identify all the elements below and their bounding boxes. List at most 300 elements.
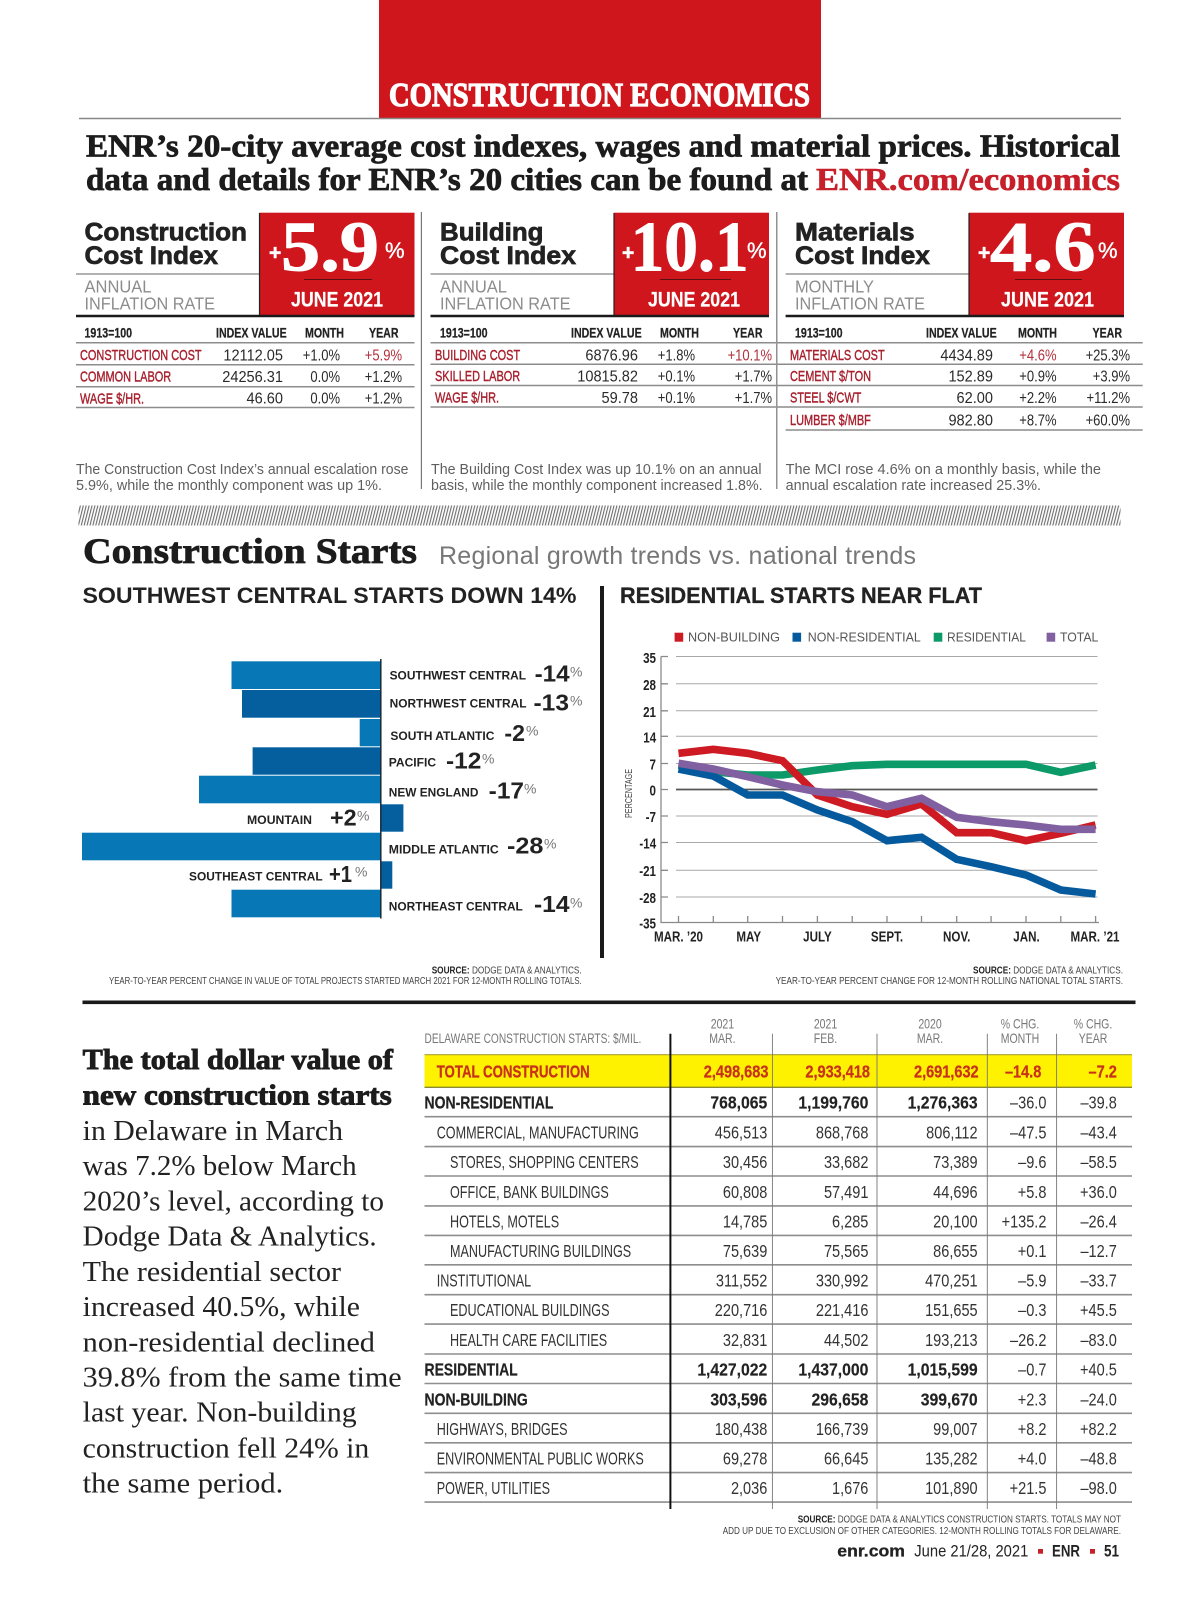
text block: Delaware summary: The total dollar value of xyxy=(83,1044,393,1076)
panel heading: Materials Cost Index: Cost Index xyxy=(795,242,930,270)
text block: Building Cost note xyxy=(431,462,763,494)
row: manufacturing buildings: 75,565 xyxy=(824,1242,868,1261)
label: New England -17%: NEW ENGLAND xyxy=(389,786,479,800)
page footer: ENR xyxy=(1052,1543,1080,1561)
callout: +10.1% June 2021 xyxy=(614,209,769,316)
row: educational buildings: 221,416 xyxy=(816,1301,868,1320)
highlighted row: total construction: 2,691,632 xyxy=(914,1062,979,1082)
table: Materials Cost Index values: 982.80 xyxy=(948,412,993,429)
row: residential: 1,427,022 xyxy=(697,1360,767,1380)
row: highways, bridges: 166,739 xyxy=(816,1420,868,1439)
panel: Building Cost Index xyxy=(430,209,776,494)
y axis labels: 0 xyxy=(650,782,656,799)
row: non-residential xyxy=(424,1093,1117,1113)
label: Mountain +2%: % xyxy=(357,808,369,824)
table: Construction Cost Index values: +5.9% xyxy=(365,348,402,365)
y axis labels xyxy=(623,650,657,932)
row: residential: RESIDENTIAL xyxy=(424,1361,518,1380)
highlighted row: total construction: 2,933,418 xyxy=(805,1062,870,1082)
table header: 2021 xyxy=(711,1016,734,1032)
callout: +10.1% June 2021: + xyxy=(622,242,634,264)
label: Northeast Central -14%: -14 xyxy=(534,891,570,917)
label: Mountain +2% xyxy=(247,804,369,830)
table: Materials Cost Index values: +8.7% xyxy=(1019,412,1057,430)
bar chart: regional starts xyxy=(82,659,582,918)
text block: Building Cost note: basis, while the monthly component increased 1.8%. xyxy=(431,478,763,494)
highlighted row: total construction: –7.2 xyxy=(1089,1062,1117,1082)
table header: MONTH xyxy=(1001,1031,1039,1047)
x axis labels: JAN. xyxy=(1013,928,1040,945)
headline: ENR.com/economics xyxy=(816,161,1120,197)
source note: Delaware table xyxy=(723,1515,1121,1537)
source note: Delaware table: ADD UP DUE TO EXCLUSION OF OTHER CATEGORIES. 12-MONTH ROLLING TOTALS FOR DELAWARE. xyxy=(723,1526,1121,1537)
callout: +4.6% June 2021: + xyxy=(978,242,990,264)
label: Pacific -12%: -12 xyxy=(446,748,481,774)
y axis labels: -21 xyxy=(639,863,656,879)
table: Construction Cost Index values: +1.0% xyxy=(303,348,340,365)
row: stores, shopping centers: STORES, SHOPPING CENTERS xyxy=(450,1153,639,1173)
label: New England -17%: -17 xyxy=(489,778,524,804)
row: highways, bridges: 99,007 xyxy=(933,1420,978,1439)
table: Materials Cost Index values: INDEX VALUE xyxy=(926,325,997,341)
callout: +5.9% June 2021 xyxy=(260,209,414,316)
row: hotels, motels: 20,100 xyxy=(933,1212,978,1232)
x axis labels: MAY xyxy=(736,928,761,945)
row: office, bank buildings: 60,808 xyxy=(723,1183,767,1202)
table: Materials Cost Index values: +25.3% xyxy=(1086,348,1130,365)
table: Materials Cost Index values: +0.9% xyxy=(1019,369,1057,386)
table header: DELAWARE CONSTRUCTION STARTS: $/MIL. xyxy=(424,1031,641,1046)
row: hotels, motels: 6,285 xyxy=(832,1212,868,1232)
row: non-building: NON-BUILDING xyxy=(424,1391,528,1410)
row: environmental public works: –48.8 xyxy=(1080,1449,1117,1469)
row: office, bank buildings xyxy=(450,1183,1117,1202)
table header: FEB. xyxy=(814,1031,837,1047)
row: educational buildings: +45.5 xyxy=(1080,1301,1117,1320)
row: residential: +40.5 xyxy=(1080,1360,1117,1380)
row: environmental public works: 135,282 xyxy=(925,1449,978,1469)
row: highways, bridges: HIGHWAYS, BRIDGES xyxy=(437,1420,568,1439)
row: hotels, motels: 14,785 xyxy=(723,1212,767,1232)
chart heading: Southwest Central starts down 14%: SOUTHWEST CENTRAL STARTS DOWN 14% xyxy=(82,583,576,608)
x axis labels: MAR. ’20 xyxy=(654,928,703,945)
text block: Delaware summary: the same period. xyxy=(83,1467,283,1499)
y axis labels: -14 xyxy=(639,835,657,852)
text block: Delaware summary: 39.8% from the same time xyxy=(83,1362,402,1394)
table: Materials Cost Index values: 62.00 xyxy=(957,390,993,407)
row: institutional: INSTITUTIONAL xyxy=(437,1272,531,1291)
text block: Delaware summary: last year. Non-building xyxy=(83,1397,357,1429)
row: environmental public works: 66,645 xyxy=(824,1449,868,1469)
row: highways, bridges: +8.2 xyxy=(1018,1420,1046,1439)
label: Middle Atlantic -28%: % xyxy=(544,836,556,852)
label: Pacific -12% xyxy=(389,748,494,774)
highlighted row: total construction: TOTAL CONSTRUCTION xyxy=(437,1062,590,1082)
panel heading: Building Cost Index xyxy=(430,219,614,314)
source note: bar chart xyxy=(109,965,582,987)
table: Building Cost Index values: 6876.96 xyxy=(585,347,638,365)
row: stores, shopping centers xyxy=(450,1153,1117,1173)
row: health care facilities: 44,502 xyxy=(824,1331,868,1350)
row: stores, shopping centers: 33,682 xyxy=(824,1153,868,1172)
table: Building Cost Index values: +10.1% xyxy=(728,348,772,365)
row: office, bank buildings: 57,491 xyxy=(824,1183,868,1202)
table: Construction Cost Index values: 12112.05 xyxy=(223,347,283,365)
row: hotels, motels: –26.4 xyxy=(1080,1212,1117,1232)
source note: line chart: YEAR-TO-YEAR PERCENT CHANGE FOR 12-MONTH ROLLING NATIONAL TOTAL STARTS. xyxy=(776,976,1123,987)
row: highways, bridges: 180,438 xyxy=(715,1420,767,1439)
text block: Materials Cost note xyxy=(786,462,1101,494)
callout: +5.9% June 2021: 5.9 xyxy=(281,209,379,287)
callout: +5.9% June 2021: % xyxy=(385,238,405,263)
text block: Construction Cost note: 5.9%, while the monthly component was up 1%. xyxy=(76,478,382,494)
table: Building Cost Index values: BUILDING COST xyxy=(435,346,520,363)
table header: YEAR xyxy=(1079,1031,1108,1047)
table: Materials Cost Index values: YEAR xyxy=(1093,325,1122,341)
row: office, bank buildings: 44,696 xyxy=(933,1183,978,1202)
label: Northeast Central -14% xyxy=(389,891,582,917)
callout: +10.1% June 2021: % xyxy=(747,238,767,263)
source note: line chart: SOURCE: DODGE DATA & ANALYTICS. xyxy=(973,965,1123,976)
text block: Delaware summary: was 7.2% below March xyxy=(83,1150,357,1182)
page footer: 51 xyxy=(1104,1543,1119,1561)
table: Building Cost Index values: +1.7% xyxy=(735,369,772,386)
table: Construction Cost Index values: COMMON LABOR xyxy=(80,368,171,385)
grid and axes xyxy=(661,656,1099,922)
table header: 2021 xyxy=(814,1016,837,1032)
row: stores, shopping centers: 30,456 xyxy=(723,1153,767,1172)
table: Materials Cost Index values: LUMBER $/MBF xyxy=(790,411,871,428)
table: Construction Cost Index values: WAGE $/HR. xyxy=(80,390,144,407)
row: residential: 1,437,000 xyxy=(798,1360,868,1380)
row: manufacturing buildings xyxy=(450,1242,1117,1261)
label: Northeast Central -14%: NORTHEAST CENTRAL xyxy=(389,900,523,914)
panel heading: Construction Cost Index xyxy=(76,219,260,314)
row: non-building: 303,596 xyxy=(710,1390,767,1410)
row: power, utilities: 1,676 xyxy=(832,1479,868,1498)
row: commercial, manufacturing: –47.5 xyxy=(1010,1123,1046,1143)
row: highways, bridges: +82.2 xyxy=(1080,1420,1117,1439)
row: health care facilities xyxy=(450,1331,1117,1351)
label: Southeast Central +1%: % xyxy=(355,864,367,880)
label: South Atlantic -2%: -2 xyxy=(504,720,525,746)
headline xyxy=(86,128,1120,197)
row: institutional xyxy=(437,1271,1117,1291)
table: Building Cost Index values xyxy=(430,325,776,407)
series: non-residential xyxy=(678,769,1096,894)
callout: +10.1% June 2021: 10.1 xyxy=(631,209,749,287)
text block: Delaware summary: construction fell 24% in xyxy=(83,1432,370,1464)
table: Building Cost Index values: INDEX VALUE xyxy=(571,325,642,341)
text block: Construction Cost note xyxy=(76,462,408,494)
label: Southeast Central +1% xyxy=(189,861,367,887)
label: Mountain +2%: +2 xyxy=(330,804,357,830)
label: Pacific -12%: PACIFIC xyxy=(389,756,436,770)
label: Pacific -12%: % xyxy=(482,750,494,766)
row: manufacturing buildings: –12.7 xyxy=(1080,1242,1117,1261)
row: commercial, manufacturing: COMMERCIAL, MANUFACTURING xyxy=(437,1124,639,1143)
table header: MAR. xyxy=(917,1031,943,1047)
row: hotels, motels xyxy=(450,1212,1117,1232)
table header: % CHG. xyxy=(1074,1016,1112,1032)
heading: Construction Starts: Construction Starts xyxy=(83,531,417,571)
panel heading: Materials Cost Index: Materials xyxy=(795,219,915,247)
table: Construction Cost Index values: 0.0% xyxy=(310,369,340,386)
text block: Delaware summary: The residential sector xyxy=(83,1256,341,1288)
table: Construction Cost Index values: 46.60 xyxy=(247,390,283,408)
row: commercial, manufacturing: 868,768 xyxy=(816,1123,868,1143)
row: health care facilities: HEALTH CARE FACILITIES xyxy=(450,1331,607,1351)
table: Construction Cost Index values: INDEX VALUE xyxy=(216,325,287,341)
panel heading: Construction Cost Index: ANNUAL xyxy=(84,277,152,297)
table: Construction Cost Index values: 1913=100 xyxy=(85,325,132,341)
label: Southwest Central -14%: SOUTHWEST CENTRAL xyxy=(390,668,526,682)
panel heading: Building Cost Index: INFLATION RATE xyxy=(440,294,570,314)
x axis labels xyxy=(654,928,1119,945)
table: Materials Cost Index values: +3.9% xyxy=(1093,369,1130,386)
callout: +10.1% June 2021: JUNE 2021 xyxy=(648,289,740,312)
row: non-residential: 768,065 xyxy=(710,1093,767,1113)
row: institutional: 311,552 xyxy=(716,1271,767,1291)
row: educational buildings: EDUCATIONAL BUILDINGS xyxy=(450,1301,609,1321)
text block: Building Cost note: The Building Cost Index was up 10.1% on an annual xyxy=(431,462,762,478)
callout: +5.9% June 2021: + xyxy=(269,242,281,264)
headline: ENR’s 20-city average cost indexes, wages and material prices. Historical xyxy=(86,128,1120,164)
label: Middle Atlantic -28%: -28 xyxy=(507,832,543,858)
source note: Delaware table: SOURCE: DODGE DATA & ANALYTICS CONSTRUCTION STARTS. TOTALS MAY NOT xyxy=(798,1515,1121,1526)
table header: 2020 xyxy=(918,1016,942,1032)
legend: NON-RESIDENTIAL xyxy=(808,631,921,645)
row: educational buildings: –0.3 xyxy=(1018,1301,1046,1320)
table header: MAR. xyxy=(709,1031,736,1047)
line chart: national starts xyxy=(623,631,1119,945)
x axis labels: JULY xyxy=(803,928,832,945)
table: Materials Cost Index values: CEMENT $/TON xyxy=(790,367,871,384)
panel heading: Building Cost Index: Building xyxy=(440,219,544,247)
page footer: enr.com xyxy=(837,1543,905,1561)
row: non-residential: –36.0 xyxy=(1010,1093,1046,1113)
row: commercial, manufacturing: –43.4 xyxy=(1080,1123,1117,1143)
label: Southeast Central +1%: +1 xyxy=(329,861,352,887)
label: Middle Atlantic -28%: MIDDLE ATLANTIC xyxy=(389,842,499,856)
row: non-building: 399,670 xyxy=(921,1390,978,1410)
row: highways, bridges xyxy=(437,1420,1117,1439)
row: educational buildings: 151,655 xyxy=(925,1301,978,1320)
row: residential: –0.7 xyxy=(1018,1360,1046,1380)
source note: line chart xyxy=(776,965,1123,987)
section banner: Construction Economics xyxy=(79,0,1121,118)
row: non-building: –24.0 xyxy=(1080,1390,1117,1410)
row rules xyxy=(424,1117,1132,1502)
row: manufacturing buildings: 86,655 xyxy=(933,1242,978,1261)
legend: RESIDENTIAL xyxy=(947,631,1026,645)
row: commercial, manufacturing xyxy=(437,1123,1117,1143)
panel heading: Materials Cost Index xyxy=(786,219,969,314)
text block: Delaware summary: 2020’s level, according to xyxy=(83,1186,384,1218)
row: office, bank buildings: +36.0 xyxy=(1080,1183,1117,1202)
x axis labels: MAR. ’21 xyxy=(1071,928,1119,945)
heading: Construction Starts xyxy=(83,531,916,571)
legend: NON-BUILDING xyxy=(688,631,780,645)
panel: Materials Cost Index xyxy=(777,209,1143,494)
panel heading: Building Cost Index: ANNUAL xyxy=(440,277,507,297)
x axis labels: NOV. xyxy=(943,928,970,945)
table: Materials Cost Index values: MONTH xyxy=(1018,325,1057,341)
panel: Construction Cost Index xyxy=(76,209,414,494)
row: institutional: –33.7 xyxy=(1080,1271,1117,1291)
headline: data and details for ENR’s 20 cities can be found at xyxy=(86,161,808,197)
y axis labels: -7 xyxy=(646,809,656,825)
row: environmental public works: 69,278 xyxy=(723,1449,767,1469)
source note: bar chart: YEAR-TO-YEAR PERCENT CHANGE IN VALUE OF TOTAL PROJECTS STARTED MARCH 2021 FOR 12-MONTH ROLLING TOTALS. xyxy=(109,976,582,987)
row: non-residential: 1,276,363 xyxy=(908,1093,978,1113)
panel heading: Building Cost Index: Cost Index xyxy=(440,242,576,270)
row: non-residential: 1,199,760 xyxy=(798,1093,868,1113)
text block: Delaware summary: non-residential declined xyxy=(83,1327,376,1359)
label: Northwest Central -13%: % xyxy=(570,692,582,708)
table: Construction Cost Index values: +1.2% xyxy=(365,391,402,408)
table: Construction Cost Index values: 24256.31 xyxy=(222,369,283,386)
callout: +4.6% June 2021: 4.6 xyxy=(990,209,1096,287)
panel heading: Construction Cost Index: Construction xyxy=(84,219,247,247)
row: manufacturing buildings: +0.1 xyxy=(1018,1242,1046,1261)
y axis labels: 35 xyxy=(643,650,656,666)
label: Middle Atlantic -28% xyxy=(389,832,556,858)
row: office, bank buildings: +5.8 xyxy=(1018,1183,1046,1202)
table: Building Cost Index values: SKILLED LABOR xyxy=(435,367,520,384)
panel heading: Construction Cost Index: INFLATION RATE xyxy=(84,294,215,314)
row: power, utilities: +21.5 xyxy=(1010,1479,1046,1498)
legend xyxy=(675,631,1098,645)
table: Materials Cost Index values xyxy=(777,325,1143,430)
series: non-building xyxy=(678,749,1096,841)
table: Building Cost Index values: 59.78 xyxy=(602,390,638,407)
row: non-building xyxy=(424,1390,1117,1410)
table: Materials Cost Index values: +2.2% xyxy=(1019,390,1057,407)
row: power, utilities xyxy=(437,1479,1117,1499)
series: total xyxy=(678,763,1096,829)
row: environmental public works: ENVIRONMENTAL PUBLIC WORKS xyxy=(437,1450,644,1469)
table: Building Cost Index values: WAGE $/HR. xyxy=(435,389,499,406)
table: Building Cost Index values: 10815.82 xyxy=(577,368,638,386)
y axis labels: 14 xyxy=(643,729,657,746)
text block: Materials Cost note: annual escalation rate increased 25.3%. xyxy=(786,478,1041,494)
label: Northwest Central -13% xyxy=(390,690,582,716)
table: Construction Cost Index values: YEAR xyxy=(369,325,399,341)
text block: Materials Cost note: The MCI rose 4.6% on a monthly basis, while the xyxy=(786,462,1101,478)
table: Construction Cost Index values: 0.0% xyxy=(310,391,340,408)
table: Construction Cost Index values: +1.2% xyxy=(365,369,402,386)
y axis labels: PERCENTAGE xyxy=(623,769,635,818)
row: power, utilities: 2,036 xyxy=(731,1479,767,1498)
table: Building Cost Index values: 1913=100 xyxy=(440,325,488,341)
row: hotels, motels: HOTELS, MOTELS xyxy=(450,1212,559,1232)
section banner: Construction Economics: CONSTRUCTION ECONOMICS xyxy=(389,77,810,114)
page footer xyxy=(837,1543,1119,1561)
row: educational buildings xyxy=(450,1301,1117,1321)
chart heading: Residential starts near flat: RESIDENTIAL STARTS NEAR FLAT xyxy=(620,583,982,608)
highlighted row: total construction: 2,498,683 xyxy=(704,1062,768,1082)
table: Delaware construction starts xyxy=(424,1016,1132,1509)
label: South Atlantic -2%: % xyxy=(526,722,538,738)
table: Materials Cost Index values: MATERIALS COST xyxy=(790,346,885,363)
table: Building Cost Index values: +1.7% xyxy=(735,390,772,407)
row: health care facilities: –26.2 xyxy=(1010,1331,1046,1350)
callout: +4.6% June 2021 xyxy=(969,209,1124,316)
y axis labels: 21 xyxy=(643,704,656,720)
x axis labels: SEPT. xyxy=(871,928,903,945)
table header xyxy=(424,1016,1112,1047)
row: institutional: 330,992 xyxy=(816,1271,868,1291)
column separators xyxy=(670,1034,1057,1509)
row: manufacturing buildings: 75,639 xyxy=(723,1242,767,1261)
label: Northwest Central -13%: NORTHWEST CENTRAL xyxy=(390,697,526,711)
text block: Construction Cost note: The Construction Cost Index’s annual escalation rose xyxy=(76,462,408,478)
table: Materials Cost Index values: +11.2% xyxy=(1087,390,1130,407)
row: non-building: +2.3 xyxy=(1018,1390,1046,1410)
label: South Atlantic -2%: SOUTH ATLANTIC xyxy=(390,729,495,743)
row: health care facilities: 32,831 xyxy=(723,1331,767,1350)
label: Northwest Central -13%: -13 xyxy=(534,690,569,716)
source note: bar chart: SOURCE: DODGE DATA & ANALYTICS. xyxy=(432,965,582,976)
row: power, utilities: –98.0 xyxy=(1080,1479,1117,1498)
table: Materials Cost Index values: 152.89 xyxy=(948,368,993,386)
row: health care facilities: 193,213 xyxy=(925,1331,978,1350)
row: non-residential: –39.8 xyxy=(1080,1093,1117,1113)
table: Materials Cost Index values: +60.0% xyxy=(1086,412,1130,430)
y axis labels: 7 xyxy=(650,756,656,773)
row: stores, shopping centers: –9.6 xyxy=(1018,1153,1046,1172)
panel heading: Construction Cost Index: Cost Index xyxy=(84,242,218,270)
row: stores, shopping centers: 73,389 xyxy=(933,1153,978,1172)
label: South Atlantic -2% xyxy=(390,720,538,746)
table: Materials Cost Index values: 4434.89 xyxy=(940,347,993,365)
panel heading: Materials Cost Index: MONTHLY xyxy=(795,277,874,297)
table: Materials Cost Index values: 1913=100 xyxy=(795,325,843,341)
text block: Delaware summary: new construction starts xyxy=(83,1079,392,1111)
highlighted row: total construction: –14.8 xyxy=(1005,1062,1041,1082)
heading: Construction Starts: Regional growth trends vs. national trends xyxy=(439,542,916,570)
row: residential xyxy=(424,1360,1117,1380)
table: Building Cost Index values: +0.1% xyxy=(658,390,695,407)
y axis labels: 28 xyxy=(643,677,656,693)
series: residential xyxy=(678,764,1096,775)
text block: Delaware summary: Dodge Data & Analytics. xyxy=(83,1221,377,1253)
table: Building Cost Index values: +0.1% xyxy=(658,369,695,386)
row: institutional: –5.9 xyxy=(1018,1271,1046,1291)
highlighted row: total construction xyxy=(424,1055,1132,1087)
row: residential: 1,015,599 xyxy=(908,1360,978,1380)
table: Construction Cost Index values: MONTH xyxy=(305,325,344,341)
row: health care facilities: –83.0 xyxy=(1080,1331,1117,1350)
callout: +4.6% June 2021: % xyxy=(1098,238,1118,263)
table: Materials Cost Index values: STEEL $/CWT xyxy=(790,389,861,406)
table: Building Cost Index values: YEAR xyxy=(733,325,763,341)
table: Building Cost Index values: +1.8% xyxy=(658,348,695,365)
label: Southwest Central -14%: -14 xyxy=(535,660,570,686)
row: commercial, manufacturing: 806,112 xyxy=(926,1123,978,1143)
row: office, bank buildings: OFFICE, BANK BUILDINGS xyxy=(450,1183,609,1202)
label: Mountain +2%: MOUNTAIN xyxy=(247,813,312,827)
label: Southwest Central -14%: % xyxy=(570,664,582,680)
row: power, utilities: 101,890 xyxy=(925,1479,978,1498)
row: hotels, motels: +135.2 xyxy=(1002,1212,1046,1232)
bars xyxy=(82,659,403,918)
label: Northeast Central -14%: % xyxy=(570,894,582,910)
text block: Delaware summary: in Delaware in March xyxy=(83,1115,344,1147)
row: educational buildings: 220,716 xyxy=(715,1301,767,1320)
label: New England -17% xyxy=(389,778,536,804)
